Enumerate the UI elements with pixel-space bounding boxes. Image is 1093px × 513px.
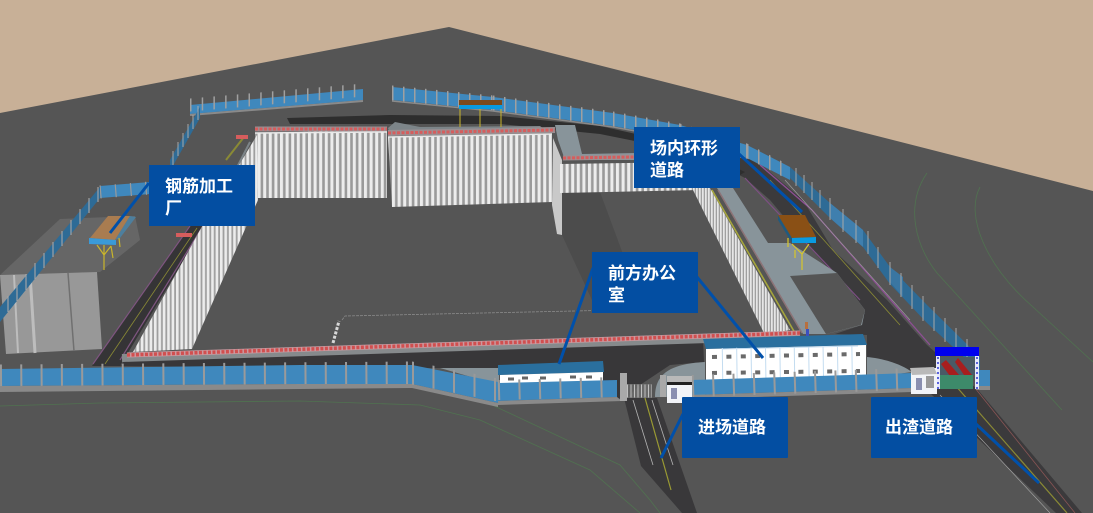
crown beam: red rails [122, 129, 800, 358]
label: exit road: 出渣道路 [885, 418, 953, 437]
label: front office: 前方办公室 [608, 264, 676, 305]
wall shadow [562, 192, 640, 300]
fence: front right [692, 373, 912, 399]
fence: top right curved [392, 87, 790, 180]
fence: left side lower [0, 187, 100, 322]
leader: exit road [976, 424, 1039, 483]
large office [703, 334, 867, 381]
canopy: left [89, 216, 136, 270]
label: front office [592, 252, 698, 313]
road: front band [120, 338, 704, 400]
leader: ring road [739, 154, 802, 212]
leader: office right [697, 277, 763, 358]
leader lines [110, 154, 1039, 483]
pile wall: top right [560, 162, 700, 193]
label: rebar yard: 钢筋加工厂 [165, 177, 233, 218]
road: right perimeter [640, 120, 1082, 513]
fence: left short [100, 182, 150, 198]
pile wall: left diagonal [133, 135, 258, 352]
fence: front left [0, 365, 412, 392]
fence: front diagonal and gate section [412, 365, 622, 407]
canopy: right [778, 215, 816, 270]
label: rebar yard [149, 165, 255, 226]
label: entry road: 进场道路 [698, 418, 766, 437]
label: ring road [634, 127, 740, 188]
gate house left [667, 376, 692, 403]
stair and temporary path inside pit [333, 310, 620, 343]
label: ring road: 场内环形道路 [650, 139, 718, 180]
leader: office left [559, 268, 593, 364]
fence: top left [190, 89, 363, 115]
worker figure [805, 322, 809, 336]
pile wall: top left [255, 130, 387, 198]
road: entrance [624, 398, 697, 513]
entrance gate [620, 373, 666, 401]
green site boundary lines [0, 173, 1093, 513]
road: top black band [287, 115, 745, 178]
label: entry road [682, 397, 788, 458]
label: exit road [871, 397, 977, 458]
exit gate [935, 347, 990, 390]
pad: grey strip top [555, 125, 636, 160]
small front office [498, 361, 604, 388]
fence: left side upper [170, 106, 200, 171]
pile wall: right diagonal [692, 188, 802, 335]
fence: right side [790, 167, 980, 372]
pile wall: top middle [388, 134, 552, 207]
canopy: top [459, 100, 502, 127]
pad: grey yard right [440, 188, 912, 397]
grey box building [0, 216, 140, 354]
leader: rebar yard [110, 183, 149, 233]
gate house right [910, 367, 937, 394]
road: left perimeter [92, 137, 250, 366]
pile wall: return [552, 138, 562, 235]
leader: entry road [661, 414, 683, 458]
